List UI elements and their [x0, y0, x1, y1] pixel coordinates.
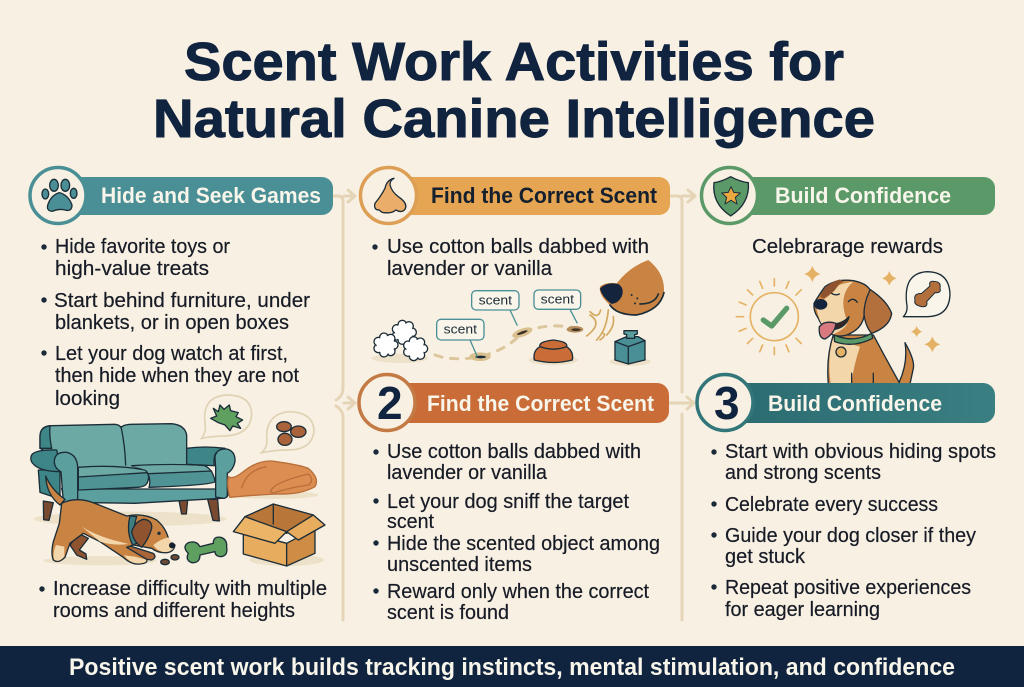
panel: find the correct scent, step 2	[359, 374, 669, 624]
callout: scent tag three	[534, 290, 581, 323]
text: first bullets: blankets, or in open boxes	[55, 311, 289, 334]
text: step 2 bullets: lavender or vanilla	[387, 461, 548, 484]
text: first bullets	[41, 235, 310, 410]
text: last bullet: Increase difficulty with multiple	[53, 577, 327, 600]
heading: find the correct scent	[360, 168, 670, 224]
text: step 2 bullets: Let your dog sniff the target	[387, 490, 629, 513]
callout: scent tag two: scent	[479, 294, 512, 308]
heading: hide and seek games	[30, 168, 333, 224]
heading: step 3	[697, 374, 995, 430]
icon: treats thought bubble	[262, 412, 314, 453]
heading: step 2	[359, 374, 669, 430]
panel: find the correct scent, upper	[360, 168, 670, 366]
icon: toy thought bubble	[202, 395, 252, 438]
icon: folded blanket	[228, 461, 318, 499]
text: step 3 bullets: get stuck	[725, 545, 806, 568]
icon: sparkles	[804, 266, 940, 352]
panel: build confidence, step 3	[697, 374, 996, 621]
text: last bullet: rooms and different heights	[53, 599, 295, 622]
panel: hide and seek games	[30, 168, 333, 622]
text: first bullets: Start behind furniture, under	[54, 289, 310, 312]
icon: treat speech bubble	[903, 272, 950, 317]
illustration: scent trail	[372, 260, 664, 366]
text: last bullet	[39, 577, 327, 622]
callout: scent tag one	[437, 319, 484, 357]
text: celebrarage rewards: Celebrarage rewards	[752, 235, 943, 258]
text: first bullets: Let your dog watch at first,	[55, 342, 288, 365]
illustration: happy dog with rewards	[736, 266, 950, 384]
text: upper bullet	[372, 235, 649, 280]
icon: scent bottle	[609, 331, 651, 366]
icon: scent wisps	[587, 310, 614, 340]
text: step 3 bullets: Start with obvious hiding spots	[725, 440, 996, 463]
footer banner: Positive scent work builds tracking instincts, mental stimulation, and confidence	[69, 654, 955, 681]
icon: bowl	[529, 340, 578, 365]
text: upper bullet: lavender or vanilla	[387, 257, 553, 280]
heading: hide and seek games: Hide and Seek Games	[101, 183, 321, 208]
heading: build confidence: Build Confidence	[775, 183, 951, 208]
text: step 3 bullets: Celebrate every success	[725, 493, 938, 516]
title: Scent Work Activities for	[184, 32, 844, 92]
heading: step 2: 2	[377, 377, 403, 429]
icon: scent spots	[469, 325, 583, 361]
illustration: dog sniffing near sofa, blanket, box and bone	[31, 395, 325, 566]
footer banner	[0, 646, 1024, 687]
panel: build confidence, upper	[702, 168, 995, 384]
heading: build confidence	[702, 168, 995, 224]
text: upper bullet: Use cotton balls dabbed with	[387, 235, 649, 258]
text: step 3 bullets: Repeat positive experiences	[725, 576, 971, 599]
heading: find the correct scent: Find the Correct Scent	[431, 183, 658, 208]
text: step 2 bullets: scent is found	[387, 601, 509, 624]
heading: step 3: Build Confidence	[768, 391, 942, 416]
icon: green bone	[185, 537, 227, 563]
text: step 2 bullets: Reward only when the correct	[387, 580, 649, 603]
text: step 3 bullets: and strong scents	[725, 461, 881, 484]
title: Natural Canine Intelligence	[153, 89, 875, 149]
text: step 2 bullets: scent	[387, 510, 434, 533]
icon: shield with star	[714, 177, 748, 216]
text: step 2 bullets: Hide the scented object among	[387, 532, 660, 555]
callout: scent tag one: scent	[444, 323, 478, 337]
text: step 3 bullets	[711, 440, 996, 621]
icon: sun with check mark	[736, 279, 801, 355]
icon: paw print	[42, 179, 77, 211]
text: first bullets: high-value treats	[55, 257, 209, 280]
text: step 2 bullets: unscented items	[387, 553, 532, 576]
icon: nose	[375, 178, 406, 213]
text: step 3 bullets: Guide your dog closer if they	[725, 524, 977, 547]
text: first bullets: Hide favorite toys or	[55, 235, 230, 258]
callout: scent tag three: scent	[541, 293, 574, 307]
icon: cotton balls	[372, 320, 428, 363]
text: step 2 bullets	[373, 440, 660, 624]
icon: happy dog	[814, 279, 914, 384]
icon: open cardboard box	[233, 504, 325, 566]
title	[153, 32, 875, 149]
arrow: connectors between column one and column two	[333, 190, 355, 620]
icon: puppy sniffing	[43, 476, 179, 565]
heading: step 2: Find the Correct Scent	[427, 391, 655, 416]
callout: scent tag two	[472, 291, 519, 326]
heading: step 3: 3	[714, 377, 740, 429]
icon: sofa	[31, 424, 235, 526]
icon: dashed trail	[435, 326, 577, 359]
text: step 2 bullets: Use cotton balls dabbed with	[387, 440, 641, 463]
arrow: connectors between column two and column three	[669, 190, 695, 620]
text: first bullets: then hide when they are not	[55, 364, 299, 387]
text: first bullets: looking	[55, 387, 120, 410]
text: step 3 bullets: for eager learning	[725, 598, 880, 621]
icon: dog snout	[600, 260, 664, 315]
